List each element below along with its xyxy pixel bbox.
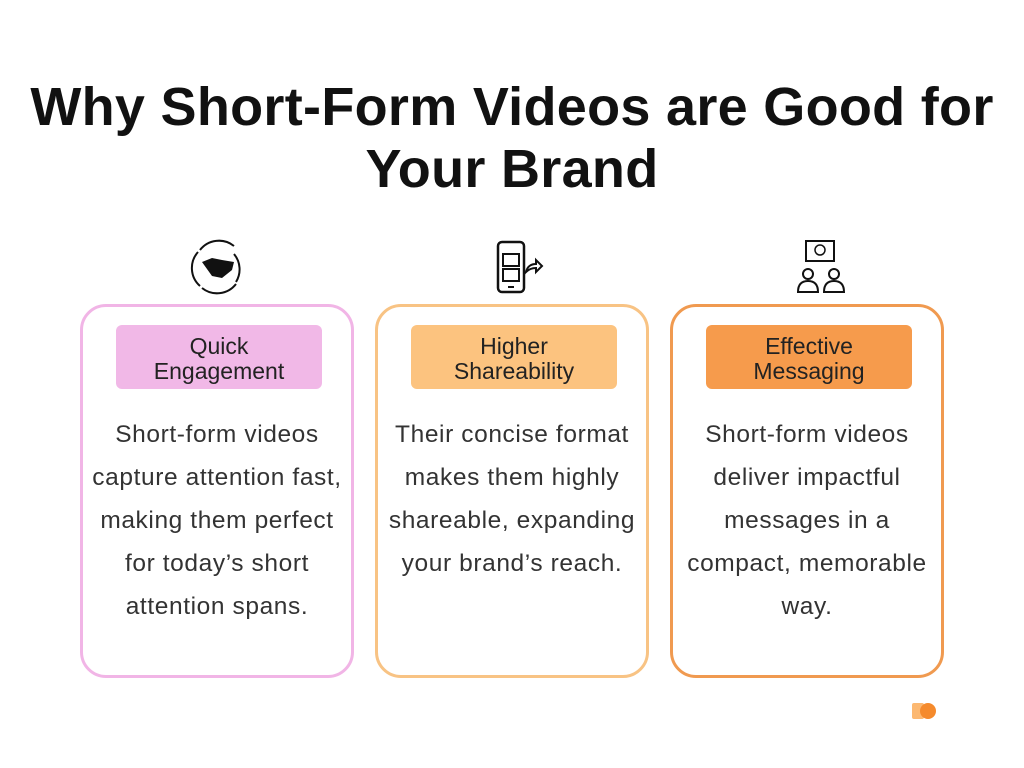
label bbox=[116, 325, 322, 389]
text: making them perfect bbox=[100, 507, 334, 534]
title: Why Short-Form Videos are Good for bbox=[30, 77, 994, 137]
icon: people messaging bbox=[797, 240, 845, 293]
label: Shareability bbox=[454, 358, 574, 384]
text: shareable, expanding bbox=[389, 507, 635, 534]
text: deliver impactful bbox=[713, 464, 901, 491]
text: capture attention fast, bbox=[92, 464, 342, 491]
label: Higher bbox=[480, 333, 548, 359]
text: compact, memorable bbox=[687, 550, 927, 577]
title: Your Brand bbox=[365, 139, 658, 199]
text: your brand’s reach. bbox=[402, 550, 622, 577]
label: Engagement bbox=[154, 358, 284, 384]
panel: quick engagement bbox=[80, 304, 354, 678]
text: messages in a bbox=[724, 507, 890, 534]
text: makes them highly bbox=[405, 464, 619, 491]
label: Messaging bbox=[753, 358, 865, 384]
label: Quick bbox=[190, 333, 248, 359]
panel: higher shareability bbox=[375, 304, 649, 678]
text: Short-form videos bbox=[115, 421, 319, 448]
text: way. bbox=[782, 593, 832, 620]
logo bbox=[912, 703, 936, 719]
text: attention spans. bbox=[126, 593, 308, 620]
icon: handshake bbox=[190, 240, 241, 294]
text bbox=[92, 421, 342, 620]
text: for today’s short bbox=[125, 550, 309, 577]
label bbox=[706, 325, 912, 389]
panel: effective messaging bbox=[670, 304, 944, 678]
label: Effective bbox=[765, 333, 853, 359]
text: Short-form videos bbox=[705, 421, 909, 448]
title bbox=[30, 77, 994, 199]
text bbox=[687, 421, 927, 620]
text bbox=[389, 421, 635, 577]
label bbox=[411, 325, 617, 389]
icon: phone share bbox=[496, 240, 544, 294]
text: Their concise format bbox=[395, 421, 629, 448]
